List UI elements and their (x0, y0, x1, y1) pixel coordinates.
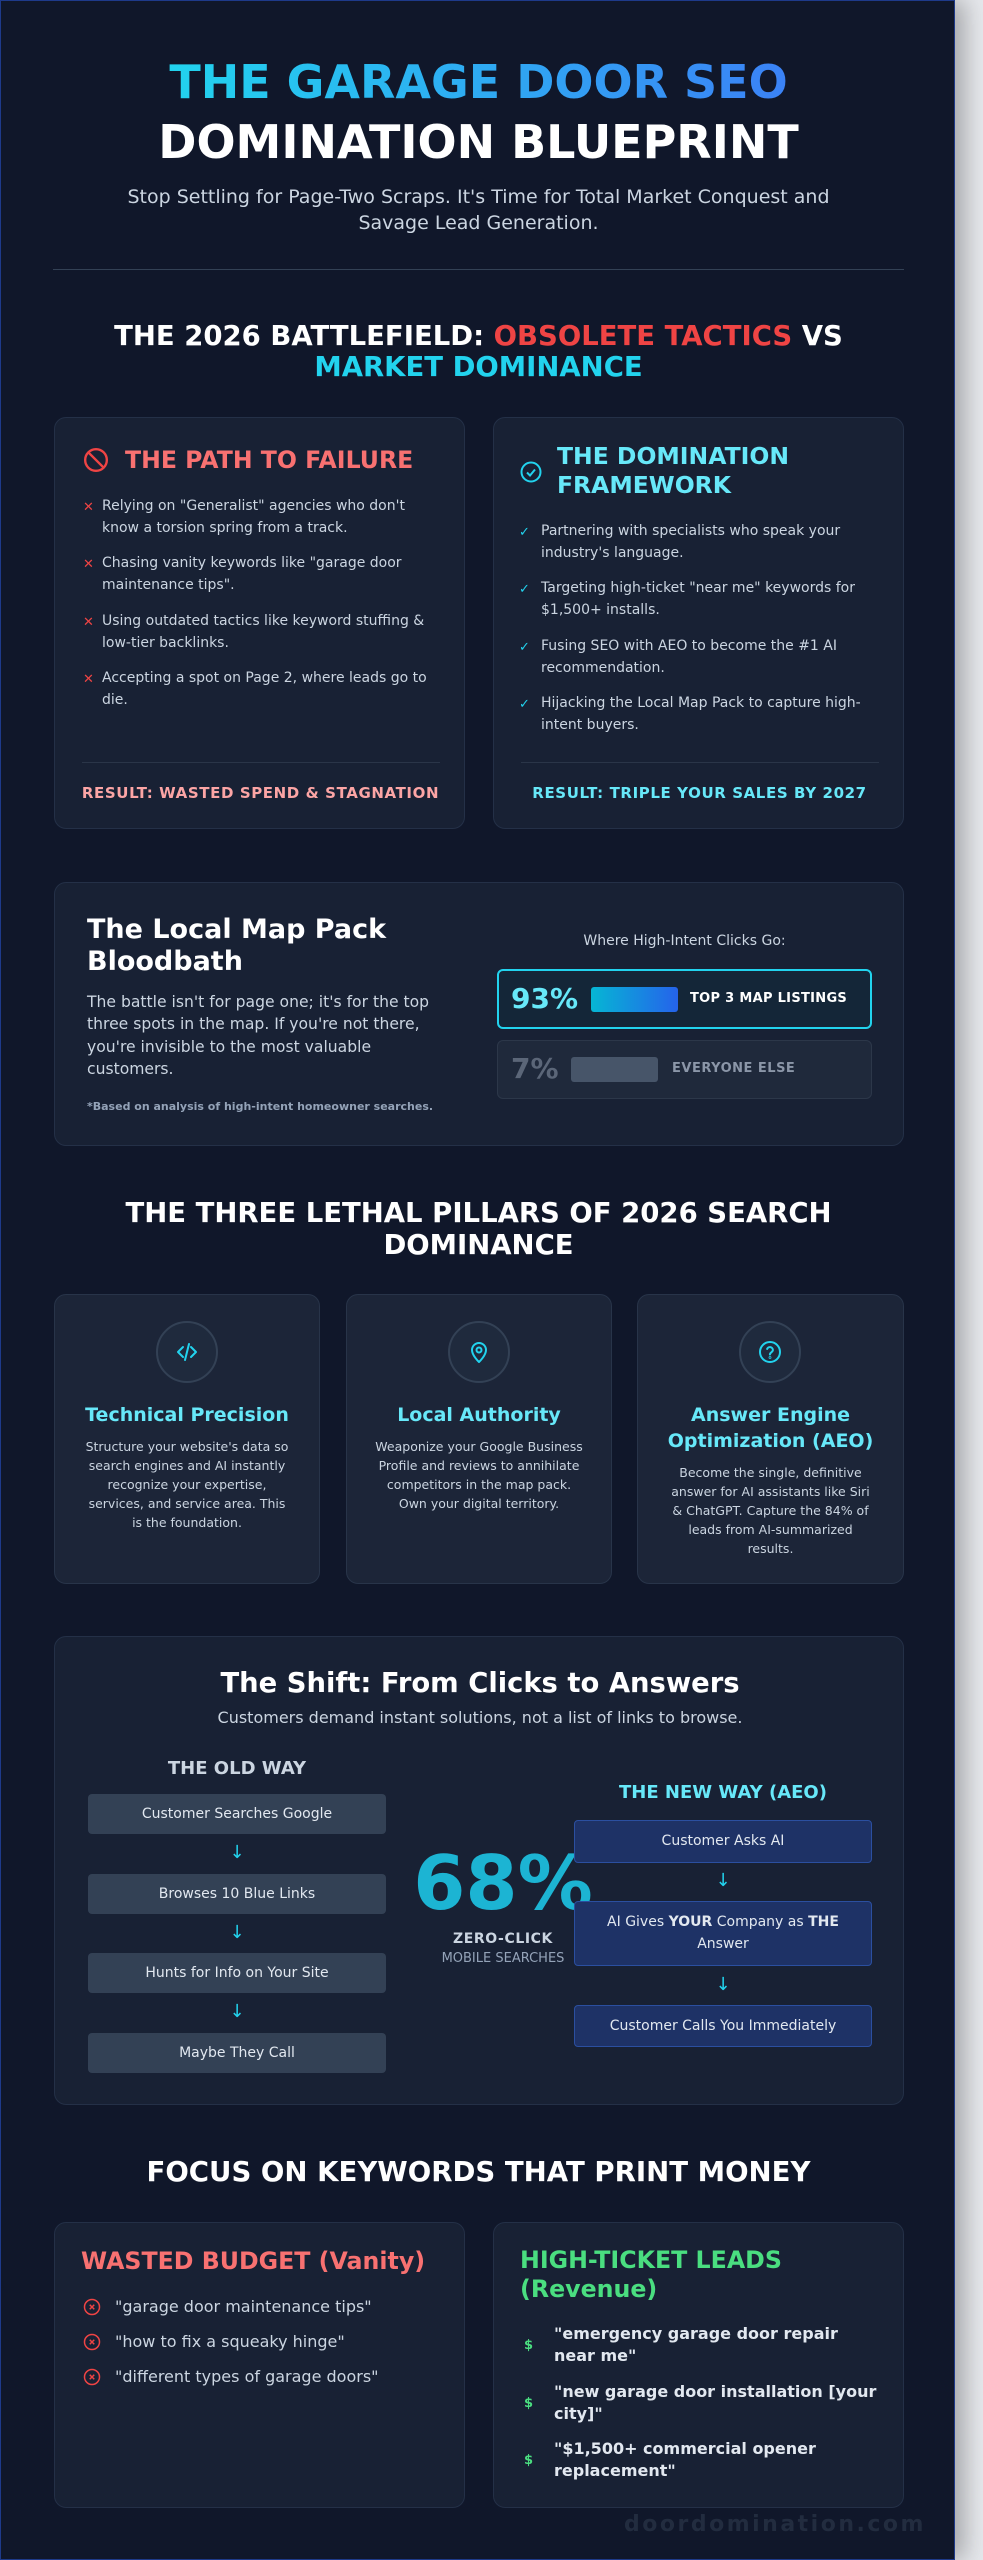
flow: old way: ↓ (229, 1842, 245, 1863)
list: revenue keywords: "emergency garage door repair (554, 2324, 838, 2343)
icon: check circle (520, 462, 542, 482)
bar: 7% (497, 1040, 872, 1099)
text: map pack description: you're invisible to the most valuable (87, 1038, 371, 1056)
list: failure items: die. (102, 692, 128, 708)
heading: map pack: The Local Map Pack (87, 914, 386, 945)
panel: domination framework (493, 417, 904, 829)
list: revenue keywords: "new garage door installation [your (554, 2382, 876, 2401)
icon: code (156, 1321, 218, 1383)
list: revenue keywords: $ (524, 2396, 533, 2411)
list: domination items: ✓ (519, 525, 530, 540)
flow: old way: THE OLD WAY (168, 1758, 306, 1779)
list: domination items (519, 523, 861, 733)
list: failure items: Accepting a spot on Page 2, where leads go to (102, 670, 427, 686)
pillar: local authority: Profile and reviews to annihilate (379, 1458, 579, 1473)
panel: the shift (54, 1636, 904, 2105)
flow: old way: ↓ (229, 2001, 245, 2022)
title: THE GARAGE DOOR SEO (169, 55, 788, 109)
pillar: technical precision: Structure your website's data so (86, 1439, 288, 1454)
text: map pack description: The battle isn't for page one; it's for the top (87, 993, 429, 1011)
heading: battlefield (114, 320, 843, 383)
panel: wasted budget: WASTED BUDGET (Vanity) (81, 2247, 425, 2275)
flow: new way (574, 1782, 872, 2047)
bar: 93%: TOP 3 MAP LISTINGS (690, 991, 847, 1006)
list: revenue keywords: replacement" (554, 2461, 676, 2480)
stat: 68% zero-click: MOBILE SEARCHES (442, 1951, 564, 1966)
list: vanity keywords: "garage door maintenance tips" (115, 2297, 372, 2316)
pillar: technical precision: search engines and AI instantly (89, 1458, 285, 1473)
pillar: local authority (346, 1294, 612, 1584)
result: domination: RESULT: TRIPLE YOUR SALES BY 2027 (532, 784, 867, 802)
footnote: *Based on analysis of high-intent homeowner searches. (87, 1100, 433, 1113)
bar: 7%: 7% (511, 1052, 559, 1085)
list: failure items: Using outdated tactics like keyword stuffing & (102, 613, 424, 629)
list: failure items: ✕ (83, 672, 94, 687)
list: domination items: Partnering with specialists who speak your (541, 523, 840, 539)
list: failure items (83, 498, 427, 708)
heading: battlefield: THE 2026 BATTLEFIELD: OBSOLETE TACTICS VS (114, 320, 843, 352)
list: revenue keywords (524, 2324, 876, 2480)
list: failure items: Relying on "Generalist" agencies who don't (102, 498, 405, 514)
flow: new way: THE NEW WAY (AEO) (619, 1782, 827, 1803)
panel: wasted budget (54, 2222, 465, 2508)
heading: map pack: Bloodbath (87, 946, 243, 977)
list: failure items: low-tier backlinks. (102, 635, 229, 651)
list: domination items: recommendation. (541, 660, 665, 676)
pillar: AEO: Answer Engine (691, 1404, 850, 1426)
flow: new way: ↓ (715, 1870, 731, 1891)
pillar: local authority: competitors in the map pack. (387, 1477, 571, 1492)
subtitle (127, 186, 830, 234)
pillar: AEO: & ChatGPT. Capture the 84% of (672, 1503, 869, 1518)
watermark: doordomination.com (624, 2512, 926, 2537)
list: vanity keywords: "different types of garage doors" (115, 2367, 379, 2386)
pillar: technical precision: recognize your expertise, (108, 1477, 266, 1492)
icon: question (739, 1321, 801, 1383)
pillar: AEO: Become the single, definitive (679, 1465, 862, 1480)
list: domination items: $1,500+ installs. (541, 602, 660, 618)
bar: 7%: EVERYONE ELSE (672, 1061, 795, 1076)
pillar: technical precision (54, 1294, 320, 1584)
flow: new way: Customer Asks AI (662, 1833, 784, 1849)
pillar: technical precision: services, and service area. This (89, 1496, 285, 1511)
pillar: technical precision: is the foundation. (132, 1515, 242, 1530)
list: domination items: Hijacking the Local Map Pack to capture high- (541, 695, 861, 711)
list: failure items: ✕ (83, 557, 94, 572)
flow: new way: Answer (697, 1936, 749, 1952)
subtitle: Savage Lead Generation. (358, 212, 599, 234)
panel: high-ticket leads: (Revenue) (520, 2275, 657, 2303)
heading: map pack (87, 914, 386, 977)
pillar: AEO: results. (748, 1541, 793, 1556)
pillar: AEO: leads from AI-summarized (688, 1522, 853, 1537)
icon: ban (84, 448, 108, 472)
text: map pack description: three spots in the map. If you're not there, (87, 1015, 420, 1033)
text: map pack description (86, 993, 429, 1078)
panel: high-ticket leads (493, 2222, 904, 2508)
flow: old way: Maybe They Call (179, 2045, 295, 2061)
list: revenue keywords: "$1,500+ commercial opener (554, 2439, 816, 2458)
stat: 68% zero-click (413, 1839, 593, 1966)
pillar: local authority: Own your digital territory. (399, 1496, 559, 1511)
flow: old way: ↓ (229, 1922, 245, 1943)
bar: 93%: 93% (511, 982, 578, 1015)
list: failure items: Chasing vanity keywords like "garage door (102, 555, 402, 571)
list: domination items: ✓ (519, 582, 530, 597)
subtitle: Stop Settling for Page-Two Scraps. It's Time for Total Market Conquest and (127, 186, 830, 208)
heading: three pillars: DOMINANCE (383, 1229, 574, 1261)
list: domination items: Fusing SEO with AEO to become the #1 AI (541, 638, 837, 654)
heading: domination: THE DOMINATION (557, 442, 789, 470)
flow: old way: Browses 10 Blue Links (159, 1886, 315, 1902)
result: failure: RESULT: WASTED SPEND & STAGNATION (82, 784, 439, 802)
flow: new way: AI Gives YOUR Company as THE (607, 1914, 839, 1930)
heading: three pillars: THE THREE LETHAL PILLARS OF 2026 SEARCH (125, 1197, 832, 1229)
list: domination items: intent buyers. (541, 717, 639, 733)
heading: domination (557, 442, 789, 499)
flow: old way: Customer Searches Google (142, 1806, 332, 1822)
heading: shift: The Shift: From Clicks to Answers (220, 1668, 740, 1699)
icon: map pin (448, 1321, 510, 1383)
heading: domination: FRAMEWORK (557, 471, 731, 499)
bar: 93% (497, 969, 872, 1029)
list: revenue keywords: $ (524, 2453, 533, 2468)
pillar: local authority: Weaponize your Google Business (375, 1439, 583, 1454)
stat: 68% zero-click: ZERO-CLICK (453, 1931, 553, 1947)
pillar: AEO (637, 1294, 904, 1584)
heading: three pillars (125, 1197, 832, 1261)
panel: high-ticket leads: HIGH-TICKET LEADS (520, 2246, 782, 2274)
title: DOMINATION BLUEPRINT (158, 115, 799, 169)
pillar: AEO: Optimization (AEO) (668, 1430, 873, 1452)
list: failure items: ✕ (83, 615, 94, 630)
list: domination items: Targeting high-ticket "near me" keywords for (541, 580, 855, 596)
list: revenue keywords: near me" (554, 2346, 636, 2365)
text: map pack description: customers. (87, 1060, 174, 1078)
pillar: technical precision: Technical Precision (85, 1404, 289, 1426)
heading: battlefield: MARKET DOMINANCE (314, 351, 643, 383)
list: vanity keywords: "how to fix a squeaky hinge" (115, 2332, 345, 2351)
pillar: AEO: answer for AI assistants like Siri (671, 1484, 870, 1499)
list: domination items: ✓ (519, 697, 530, 712)
title (158, 55, 799, 169)
chart label: Where High-Intent Clicks Go: (583, 933, 786, 949)
heading: keywords: FOCUS ON KEYWORDS THAT PRINT MONEY (146, 2155, 810, 2188)
flow: old way: Hunts for Info on Your Site (145, 1965, 329, 1981)
flow: new way: Customer Calls You Immediately (610, 2018, 836, 2034)
panel: path to failure (54, 417, 465, 829)
list: failure items: maintenance tips". (102, 577, 235, 593)
panel: local map pack (54, 882, 904, 1146)
list: failure items: know a torsion spring from a track. (102, 520, 348, 536)
list: vanity keywords (84, 2297, 379, 2386)
list: failure items: ✕ (83, 500, 94, 515)
pillar: local authority: Local Authority (397, 1404, 561, 1426)
stat: 68% zero-click: 68% (413, 1839, 593, 1927)
flow: old way (88, 1758, 386, 2073)
flow: new way: ↓ (715, 1974, 731, 1995)
subheading: shift: Customers demand instant solutions, not a list of links to browse. (218, 1708, 742, 1727)
list: domination items: industry's language. (541, 545, 684, 561)
list: domination items: ✓ (519, 640, 530, 655)
list: revenue keywords: $ (524, 2338, 533, 2353)
heading: failure: THE PATH TO FAILURE (125, 446, 413, 474)
list: revenue keywords: city]" (554, 2404, 603, 2423)
